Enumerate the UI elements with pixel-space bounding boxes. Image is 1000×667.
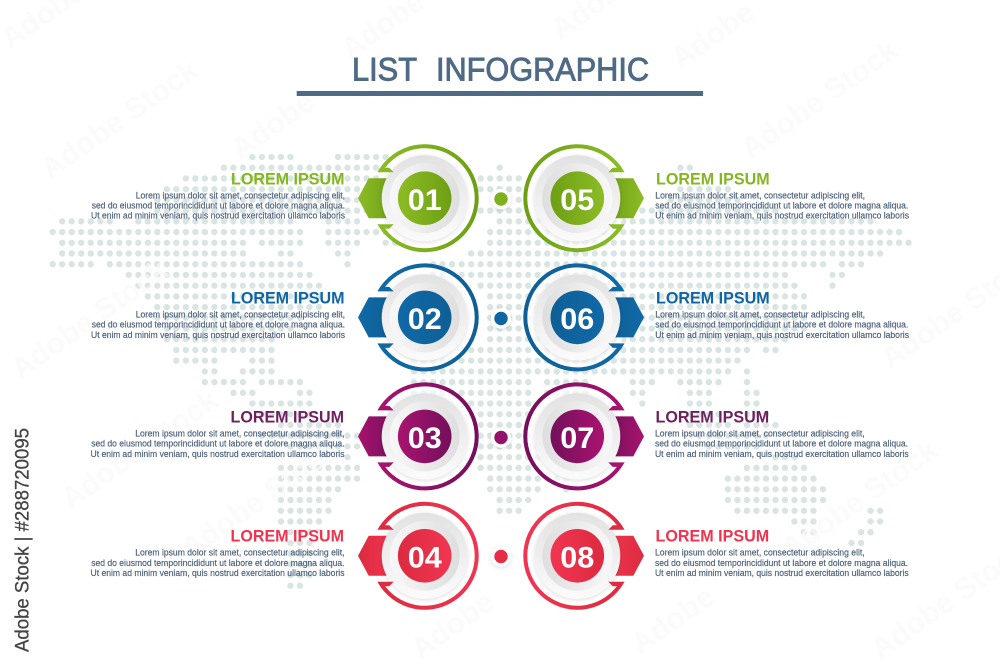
text block 03: LOREM IPSUM [230, 408, 344, 426]
watermark: Adobe Stock [35, 53, 204, 186]
center dot red [491, 546, 511, 567]
text block 06: Lorem ipsum dolor sit amet, consectetur adipiscing elit, [655, 309, 865, 319]
badge 04 [358, 502, 479, 610]
badge 06 [523, 263, 644, 371]
text block 03: sed do eiusmod temporincididunt ut labore et dolore magna aliqua. [91, 439, 344, 449]
text block 06: LOREM IPSUM [656, 289, 770, 307]
text block 07: Lorem ipsum dolor sit amet, consectetur adipiscing elit, [655, 428, 865, 438]
badge 07 [523, 382, 644, 490]
text block 07: LOREM IPSUM [656, 408, 769, 426]
watermark: Adobe [225, 85, 320, 166]
badge 08: 08 [560, 542, 594, 575]
text block 08: Ut enim ad minim veniam, quis nostrud exercitation ullamco laboris [655, 568, 909, 578]
text block 05: Ut enim ad minim veniam, quis nostrud exercitation ullamco laboris [655, 210, 909, 220]
text block 04: Lorem ipsum dolor sit amet, consectetur adipiscing elit, [135, 548, 344, 558]
text block 01 [91, 170, 345, 220]
center dot purple [491, 427, 511, 448]
badge 05: 05 [560, 184, 594, 217]
watermark: Adobe Stock [55, 383, 224, 516]
text block 01: LOREM IPSUM [231, 170, 344, 188]
text block 05 [655, 170, 909, 220]
text block 02 [91, 289, 345, 340]
text block 02: LOREM IPSUM [231, 289, 344, 307]
text block 02: sed do eiusmod temporincididunt ut labore et dolore magna aliqua. [92, 320, 345, 330]
title: LIST [352, 52, 417, 88]
badge 07: 07 [560, 422, 594, 455]
center dot green [491, 189, 511, 209]
text block 03: Ut enim ad minim veniam, quis nostrud exercitation ullamco laboris [90, 449, 345, 459]
text block 07: Ut enim ad minim veniam, quis nostrud exercitation ullamco laboris [655, 449, 909, 459]
badge 04: 04 [408, 542, 442, 575]
badge 01 [358, 144, 479, 252]
text block 06 [655, 289, 909, 340]
badge 08 [523, 502, 644, 610]
text block 05: Lorem ipsum dolor sit amet, consectetur adipiscing elit, [655, 190, 865, 200]
badge 02: 02 [408, 303, 442, 336]
watermark: Adobe [625, 580, 720, 661]
text block 06: sed do eiusmod temporincididunt ut labore et dolore magna aliqua. [655, 320, 908, 330]
text block 01: Lorem ipsum dolor sit amet, consectetur adipiscing elit, [136, 190, 345, 200]
text block 08: Lorem ipsum dolor sit amet, consectetur adipiscing elit, [655, 548, 865, 558]
badge 05 [523, 144, 644, 252]
text block 04 [90, 528, 345, 578]
badge 02 [358, 263, 479, 371]
watermark: Adobe Stock [735, 33, 904, 166]
text block 02: Lorem ipsum dolor sit amet, consectetur adipiscing elit, [136, 309, 345, 319]
text block 07 [655, 408, 909, 459]
text block 03: Lorem ipsum dolor sit amet, consectetur adipiscing elit, [135, 428, 344, 438]
center dot blue [491, 308, 511, 329]
title: INFOGRAPHIC [436, 52, 649, 88]
stock credit: Adobe Stock | #288720095 [13, 428, 34, 652]
text block 08: sed do eiusmod temporincididunt ut labore et dolore magna aliqua. [655, 558, 908, 568]
text block 05: LOREM IPSUM [656, 170, 770, 188]
watermark: Adobe Stock [175, 433, 344, 566]
dotted world map [53, 157, 909, 586]
text block 08 [655, 528, 909, 578]
badge 03: 03 [408, 422, 442, 455]
badge 06: 06 [560, 303, 594, 336]
text block 04: LOREM IPSUM [230, 528, 344, 546]
watermark: Adobe Stock [5, 253, 174, 386]
text block 04: Ut enim ad minim veniam, quis nostrud exercitation ullamco laboris [90, 568, 345, 578]
badge 03 [358, 382, 479, 490]
text block 04: sed do eiusmod temporincididunt ut labore et dolore magna aliqua. [91, 558, 344, 568]
text block 02: Ut enim ad minim veniam, quis nostrud exercitation ullamco laboris [91, 330, 345, 340]
text block 06: Ut enim ad minim veniam, quis nostrud exercitation ullamco laboris [655, 330, 909, 340]
watermark: Adobe [405, 585, 500, 666]
watermark: Adobe Stock [775, 433, 944, 566]
title underline [297, 91, 703, 96]
text block 01: Ut enim ad minim veniam, quis nostrud exercitation ullamco laboris [91, 210, 345, 220]
badge 01: 01 [408, 184, 442, 217]
text block 08: LOREM IPSUM [656, 528, 769, 546]
text block 07: sed do eiusmod temporincididunt ut labore et dolore magna aliqua. [655, 439, 908, 449]
text block 03 [90, 408, 345, 459]
text block 05: sed do eiusmod temporincididunt ut labore et dolore magna aliqua. [655, 200, 908, 210]
title [352, 52, 649, 88]
text block 01: sed do eiusmod temporincididunt ut labore et dolore magna aliqua. [92, 200, 345, 210]
